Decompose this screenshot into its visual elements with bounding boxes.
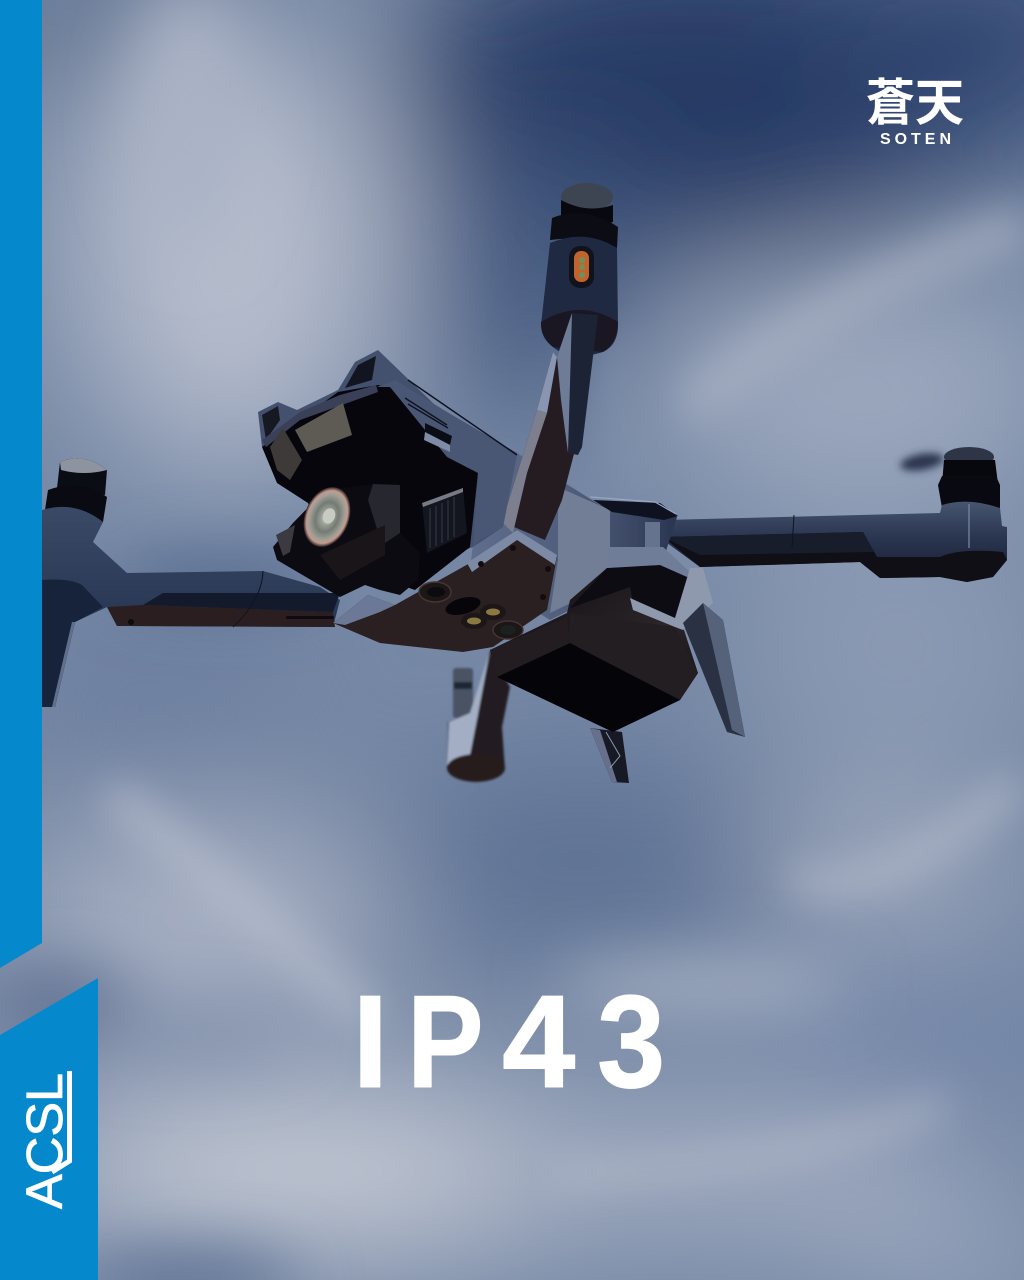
ACSL wordmark: ACSL (16, 1073, 73, 1209)
title IP43 (352, 968, 665, 1116)
blue tab with ACSL logo (0, 978, 98, 1280)
front landing leg (590, 728, 629, 783)
SOTEN logo: SOTEN (880, 131, 951, 148)
gimbal camera (273, 480, 420, 597)
title IP43: P (407, 969, 484, 1116)
drone (42, 183, 1007, 783)
title IP43: 3 (597, 969, 665, 1116)
left blue ribbon (0, 0, 42, 968)
sensor plates on underside (333, 530, 557, 652)
left arm and motor (42, 458, 340, 707)
battery block (490, 565, 698, 732)
top sensor housing (258, 350, 517, 590)
propeller blur right (899, 450, 945, 474)
top rear motor and arm (502, 183, 618, 540)
right landing leg and bracket (607, 547, 745, 737)
title IP43: I (352, 968, 389, 1115)
SOTEN logo: 蒼天 (866, 75, 964, 131)
main body (470, 453, 678, 620)
right arm and motor (663, 447, 1007, 582)
title IP43: 4 (502, 968, 575, 1115)
rear-left motor, out of focus (447, 650, 510, 782)
